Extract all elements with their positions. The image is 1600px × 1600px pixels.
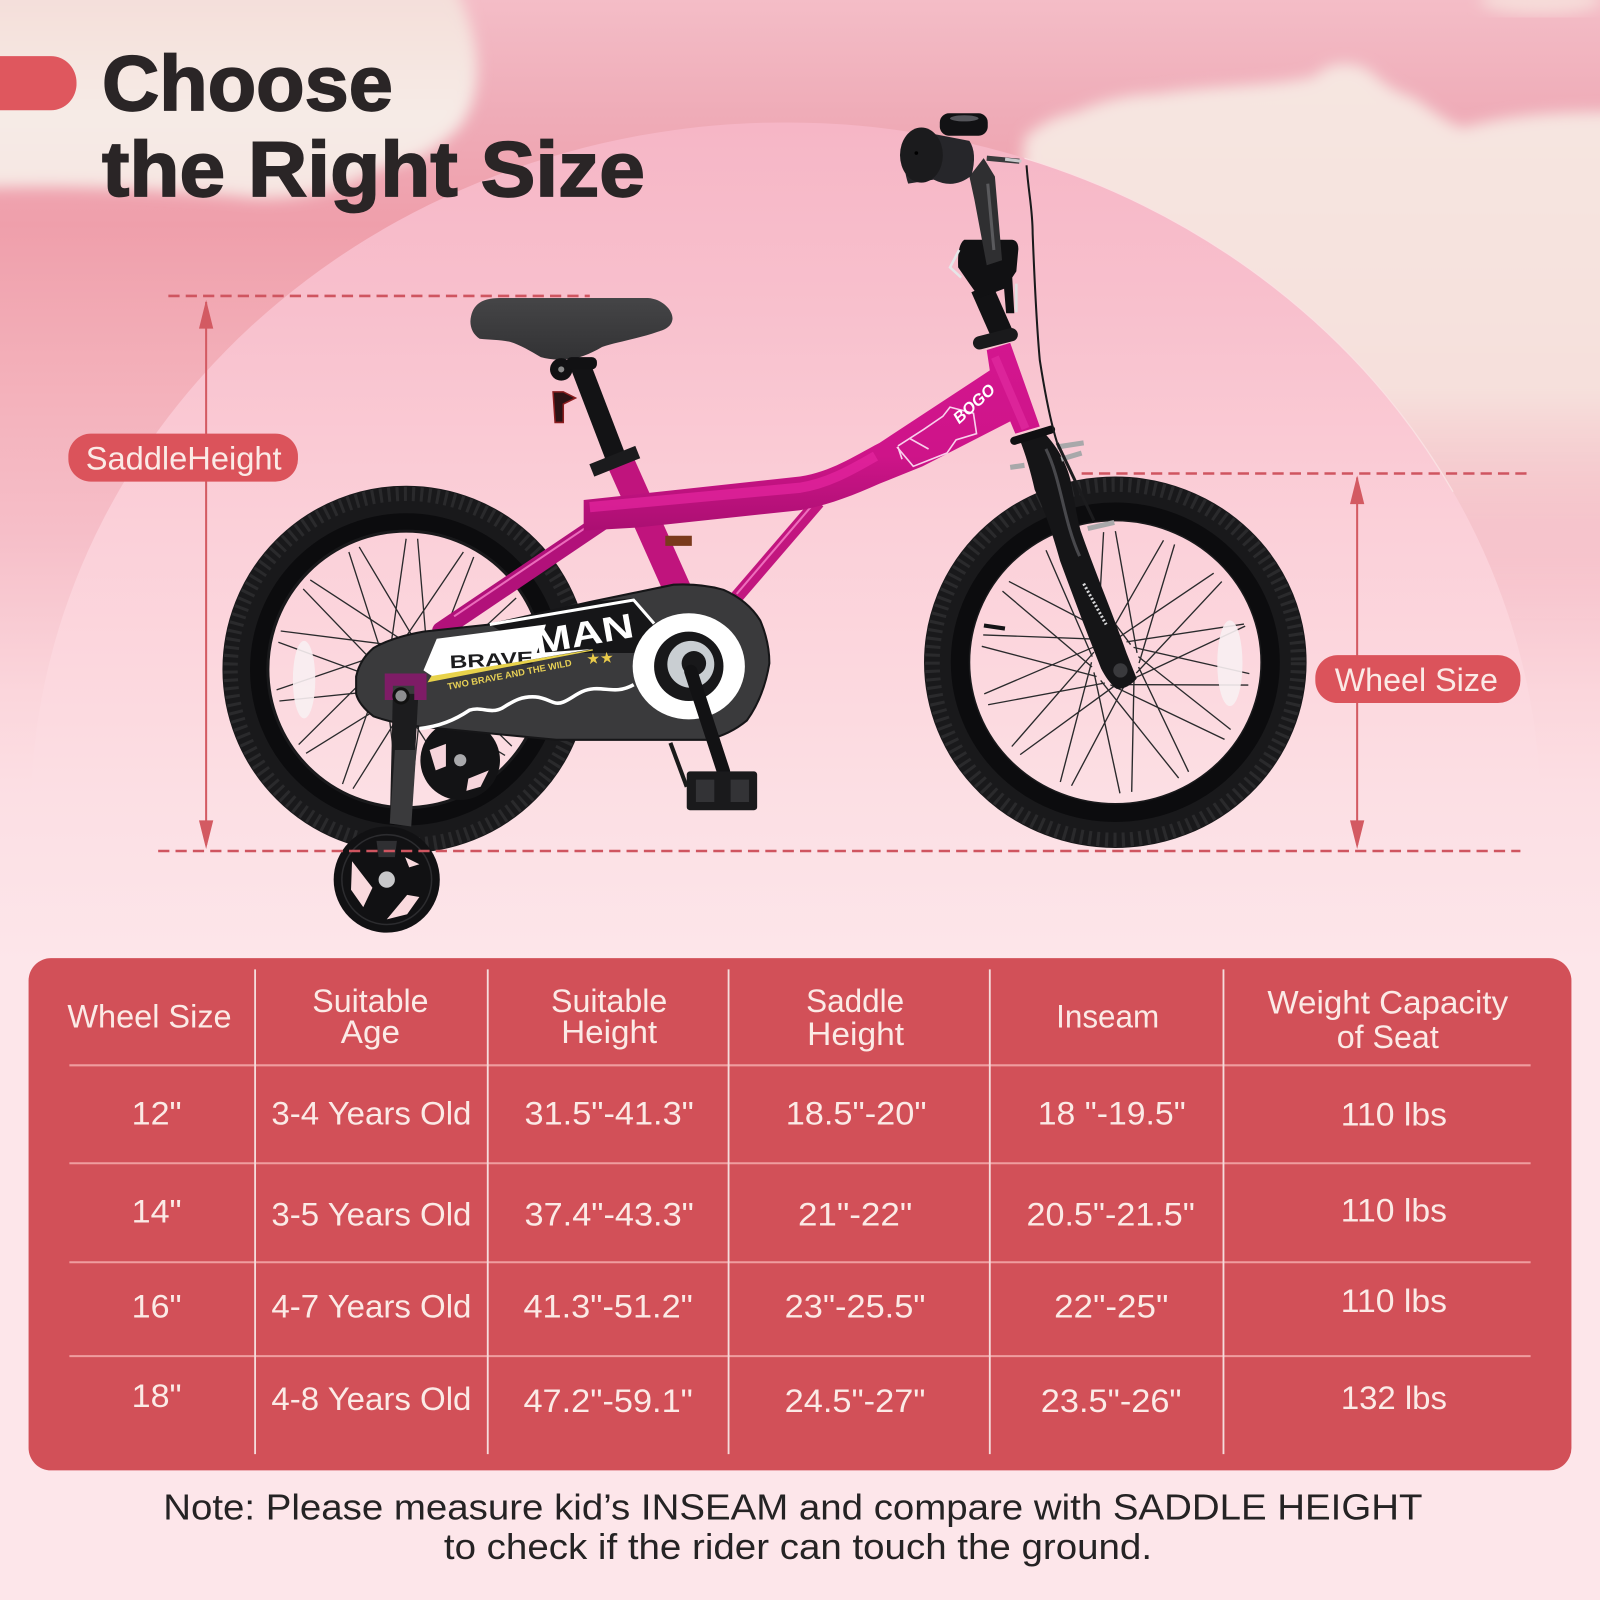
table header: Suitable <box>312 982 429 1019</box>
row: 18 inch: 18" <box>132 1377 182 1414</box>
rear small wheel <box>420 720 500 800</box>
cloud: top-left cream <box>0 0 477 198</box>
dashed top line <box>168 295 590 297</box>
row: 16 inch: 4-7 Years Old <box>271 1287 471 1324</box>
stem lower <box>982 288 1004 339</box>
brake lever block <box>958 240 1018 313</box>
front wheel <box>932 485 1298 840</box>
row: 12 inch: 18.5"-20" <box>786 1094 927 1131</box>
fork <box>1019 434 1137 689</box>
frame logo: BOGO <box>950 381 999 427</box>
row: 12 inch: 110 lbs <box>1341 1096 1447 1133</box>
row: 18 inch: 47.2"-59.1" <box>523 1382 693 1419</box>
saddle arrow <box>199 300 213 849</box>
row: 16 inch: 110 lbs <box>1341 1282 1447 1319</box>
row: 16 inch: 22"-25" <box>1054 1287 1168 1324</box>
brake cable <box>1027 165 1057 443</box>
note <box>163 1487 1422 1567</box>
rear reflector <box>293 641 315 718</box>
row: 16 inch: 41.3"-51.2" <box>523 1287 693 1324</box>
row: 12 inch <box>132 1094 1447 1133</box>
seat stay tube <box>441 518 607 631</box>
row: 14 inch: 20.5"-21.5" <box>1027 1196 1195 1233</box>
guard brand BRAVE: BRAVE <box>449 647 534 672</box>
label: wheel size <box>1315 655 1520 703</box>
brake parts <box>1010 443 1114 529</box>
saddle height measure <box>158 296 1520 851</box>
table grid <box>69 969 1531 1454</box>
seat clamp <box>592 452 638 470</box>
row: 18 inch <box>132 1377 1447 1419</box>
row: 16 inch <box>132 1282 1447 1324</box>
fork crown <box>1014 430 1051 441</box>
saddle <box>470 298 673 360</box>
dashed ground line <box>158 850 1520 852</box>
training wheel <box>334 827 440 933</box>
pedal <box>687 771 757 810</box>
row: 18 inch: 24.5"-27" <box>785 1382 926 1419</box>
row: 16 inch: 23"-25.5" <box>785 1287 926 1324</box>
note: to check if the rider can touch the ground. <box>444 1527 1152 1567</box>
table header: Suitable <box>551 982 667 1019</box>
row: 14 inch: 3-5 Years Old <box>271 1196 471 1233</box>
frame highlight <box>590 456 876 507</box>
row: 14 inch: 21"-22" <box>798 1196 912 1233</box>
gold stars: ★★ <box>586 649 614 668</box>
bicycle illustration <box>231 113 1298 933</box>
table header: Height <box>807 1015 904 1052</box>
label: saddle height: SaddleHeight <box>86 439 282 476</box>
row: 14 inch <box>132 1191 1447 1233</box>
guard brand MAN: MAN <box>532 607 637 662</box>
table header: Weight Capacity <box>1267 983 1509 1020</box>
kickstand strut behind <box>665 539 686 594</box>
note: Note: Please measure kid’s INSEAM and compare with SADDLE HEIGHT <box>163 1487 1422 1527</box>
reflector under frame <box>665 536 692 546</box>
training wheel bracket <box>385 673 427 827</box>
guard chainring disc <box>633 613 745 719</box>
table header: Wheel Size <box>67 998 232 1035</box>
gold tagline: TWO BRAVE AND THE WILD <box>446 658 573 692</box>
table header <box>67 982 1509 1055</box>
guard white banner <box>423 624 593 677</box>
valve <box>984 626 1005 629</box>
seat tube <box>618 457 678 590</box>
rear wheel <box>231 494 582 845</box>
row: 18 inch: 23.5"-26" <box>1041 1382 1182 1419</box>
wheel arrow <box>1350 476 1364 849</box>
fork decal <box>1084 584 1106 624</box>
row: 12 inch: 3-4 Years Old <box>271 1094 471 1131</box>
row: 14 inch: 14" <box>132 1192 182 1229</box>
cloud: top-right cream <box>1020 64 1600 653</box>
row: 14 inch: 37.4"-43.3" <box>524 1196 694 1233</box>
row: 12 inch: 31.5"-41.3" <box>524 1094 694 1131</box>
label: saddle height <box>68 434 298 482</box>
row: 16 inch: 16" <box>132 1287 182 1324</box>
row: 18 inch: 132 lbs <box>1341 1379 1447 1416</box>
row: 14 inch: 110 lbs <box>1341 1191 1447 1228</box>
gold stripe <box>429 650 593 682</box>
table panel <box>29 958 1571 1470</box>
title: the Right Size <box>102 127 645 213</box>
table header: Saddle <box>806 982 904 1019</box>
table header: Inseam <box>1056 998 1159 1035</box>
chain guard <box>356 584 769 740</box>
table header: Age <box>341 1013 400 1050</box>
row: 18 inch: 4-8 Years Old <box>271 1380 471 1417</box>
title: Choose <box>102 41 393 127</box>
main frame <box>584 343 1040 531</box>
handlebar stem <box>969 158 1002 265</box>
saddle clamp <box>550 357 597 381</box>
row: 12 inch: 18 "-19.5" <box>1038 1094 1186 1131</box>
kickstand <box>670 743 687 787</box>
dashed wheel top line <box>1082 472 1531 475</box>
cloud: corner <box>1480 0 1600 14</box>
fork axle <box>1113 663 1128 678</box>
bell <box>940 113 988 136</box>
crank arm <box>691 671 723 771</box>
title accent pill <box>0 56 77 110</box>
label: wheel size: Wheel Size <box>1335 661 1498 698</box>
guard dark band <box>490 598 653 653</box>
title <box>102 41 645 213</box>
front reflector <box>1217 620 1242 706</box>
down strut tube <box>737 502 818 597</box>
guard stripes <box>490 600 654 624</box>
rear reflector on post <box>553 392 576 422</box>
frame logo <box>897 381 999 466</box>
table header: Height <box>561 1013 657 1050</box>
headset collar <box>980 335 1011 343</box>
table header: of Seat <box>1337 1018 1439 1055</box>
guard wave line <box>419 685 634 729</box>
size table <box>29 958 1571 1470</box>
handlebar grip <box>900 128 974 184</box>
row: 12 inch: 12" <box>132 1094 182 1131</box>
wheel size measure <box>1082 473 1531 849</box>
seat post <box>580 363 616 459</box>
